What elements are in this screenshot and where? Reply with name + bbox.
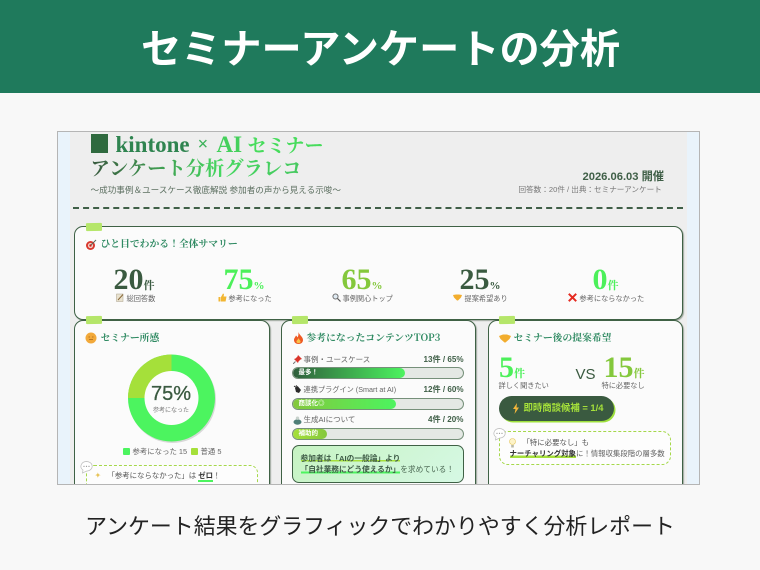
stat label: 提案希望あり (464, 294, 508, 302)
callout line 1: 「特に必要なし」も (522, 438, 589, 446)
caption: アンケート結果をグラフィックでわかりやすく分析レポート (85, 510, 675, 541)
bar label: 補助的 (298, 430, 318, 437)
callout: zero negative (86, 464, 258, 504)
legend (123, 447, 222, 456)
row value: 12件 / 60% (424, 384, 464, 394)
icon: smile face (86, 332, 96, 344)
row value: 4件 / 20% (428, 414, 464, 424)
icon: handshake (499, 334, 511, 342)
donut caption: 参考になった (153, 408, 189, 414)
icon: light bulb (509, 438, 516, 448)
icon: cross (568, 293, 577, 302)
icon: thumbs up (218, 294, 226, 302)
row label: 生成AIについて (304, 414, 355, 424)
top contents heading: 参考になったコンテンツTOP3 (306, 330, 440, 344)
bar fill (292, 428, 326, 438)
callout line 2: ナーチャリング対象に！情報収集段階の層多数 (510, 448, 665, 458)
icon: sparkle: ✦ (94, 470, 101, 480)
stat: no need: 15件 (604, 350, 644, 384)
bar fill (292, 368, 404, 378)
icon: pushpin (293, 355, 302, 364)
insight line 1: 参加者は「AIの一般論」より (300, 454, 400, 462)
stat: total responses: 20件 (114, 262, 154, 296)
title word: times: × (198, 134, 208, 154)
icon: speech bubble (80, 461, 92, 474)
donut value: 75% (151, 382, 191, 404)
panel: summary (74, 226, 682, 320)
bar fill (292, 398, 396, 408)
title square (90, 134, 108, 152)
screenshot of report (57, 131, 700, 485)
proposal heading: セミナー後の提案希望 (514, 330, 611, 344)
title banner (0, 0, 760, 93)
title line 2 (90, 158, 301, 177)
stat label: 参考にならなかった (580, 294, 644, 302)
insight box (292, 444, 464, 482)
tape (291, 315, 308, 324)
response source: 回答数：20件 / 出典：セミナーアンケート (518, 185, 662, 194)
pill: immediate lead (498, 396, 614, 420)
panel: seminar impression (74, 320, 270, 500)
bar label: 最多！ (298, 369, 318, 376)
stat label: 参考になった (228, 294, 272, 302)
icon: target (86, 240, 96, 250)
stat label: 事例関心トップ (342, 294, 393, 302)
title line 2: アンケート分析グラレコ (90, 152, 301, 180)
tape (85, 315, 102, 324)
panel: top contents (280, 320, 476, 500)
subtitle: ～成功事例＆ユースケース徹底解説 参加者の声から見える示唆～ (90, 184, 341, 194)
icon: plug (294, 385, 301, 393)
legend swatch (190, 448, 198, 454)
legend text: 参考になった 15 (132, 447, 187, 456)
stat: not useful: 0件 (592, 262, 618, 296)
event date: 2026.06.03 開催 (582, 170, 664, 182)
tape (85, 222, 102, 231)
stat label: 特に必要なし (602, 381, 645, 390)
row value: 13件 / 65% (424, 354, 464, 364)
versus: VS (576, 366, 596, 382)
insight line 2: 「自社業務にどう使えるか」を求めている！ (300, 464, 454, 474)
report title (90, 131, 324, 180)
icon: magnifier (332, 294, 341, 302)
icon: memo (116, 294, 124, 302)
callout text: 「参考にならなかった」は ゼロ！ (108, 471, 220, 480)
stat: proposal request: 25% (460, 262, 500, 296)
icon: lightning (513, 403, 519, 414)
title word: seminar: セミナー (248, 131, 324, 158)
legend text: 普通 5 (200, 447, 221, 456)
stat label: 詳しく聞きたい (498, 381, 549, 390)
icon: handshake (453, 294, 462, 300)
stat label: 総回答数 (126, 294, 155, 302)
bar 1 (292, 366, 464, 378)
impression heading: セミナー所感 (100, 330, 159, 344)
panel: proposal request (488, 320, 682, 500)
donut chart (128, 354, 216, 443)
icon: robot pot (294, 416, 302, 425)
callout: nurturing (498, 430, 670, 464)
summary heading: ひと目でわかる！全体サマリー (100, 236, 238, 250)
stat: want details: 5件 (499, 350, 525, 384)
legend swatch (122, 448, 130, 454)
bar 2 (292, 398, 464, 410)
pill text: 即時商談候補 = 1/4 (524, 402, 603, 413)
icon: speech bubble (494, 428, 506, 440)
stat: useful: 75% (224, 262, 264, 296)
dashed divider (72, 206, 682, 208)
icon: flame (294, 332, 303, 344)
stat: case study interest: 65% (342, 262, 382, 296)
row label: 事例・ユースケース (304, 354, 370, 364)
bar 3 (292, 428, 464, 440)
title: セミナーアンケートの分析 (141, 16, 620, 75)
tape (498, 315, 515, 324)
bar label: 商談化◎ (298, 400, 324, 407)
report background (70, 130, 686, 490)
title word: kintone: kintone (116, 132, 190, 156)
row label: 連携プラグイン (Smart at AI) (304, 384, 396, 394)
title word: AI: AI (216, 132, 242, 156)
